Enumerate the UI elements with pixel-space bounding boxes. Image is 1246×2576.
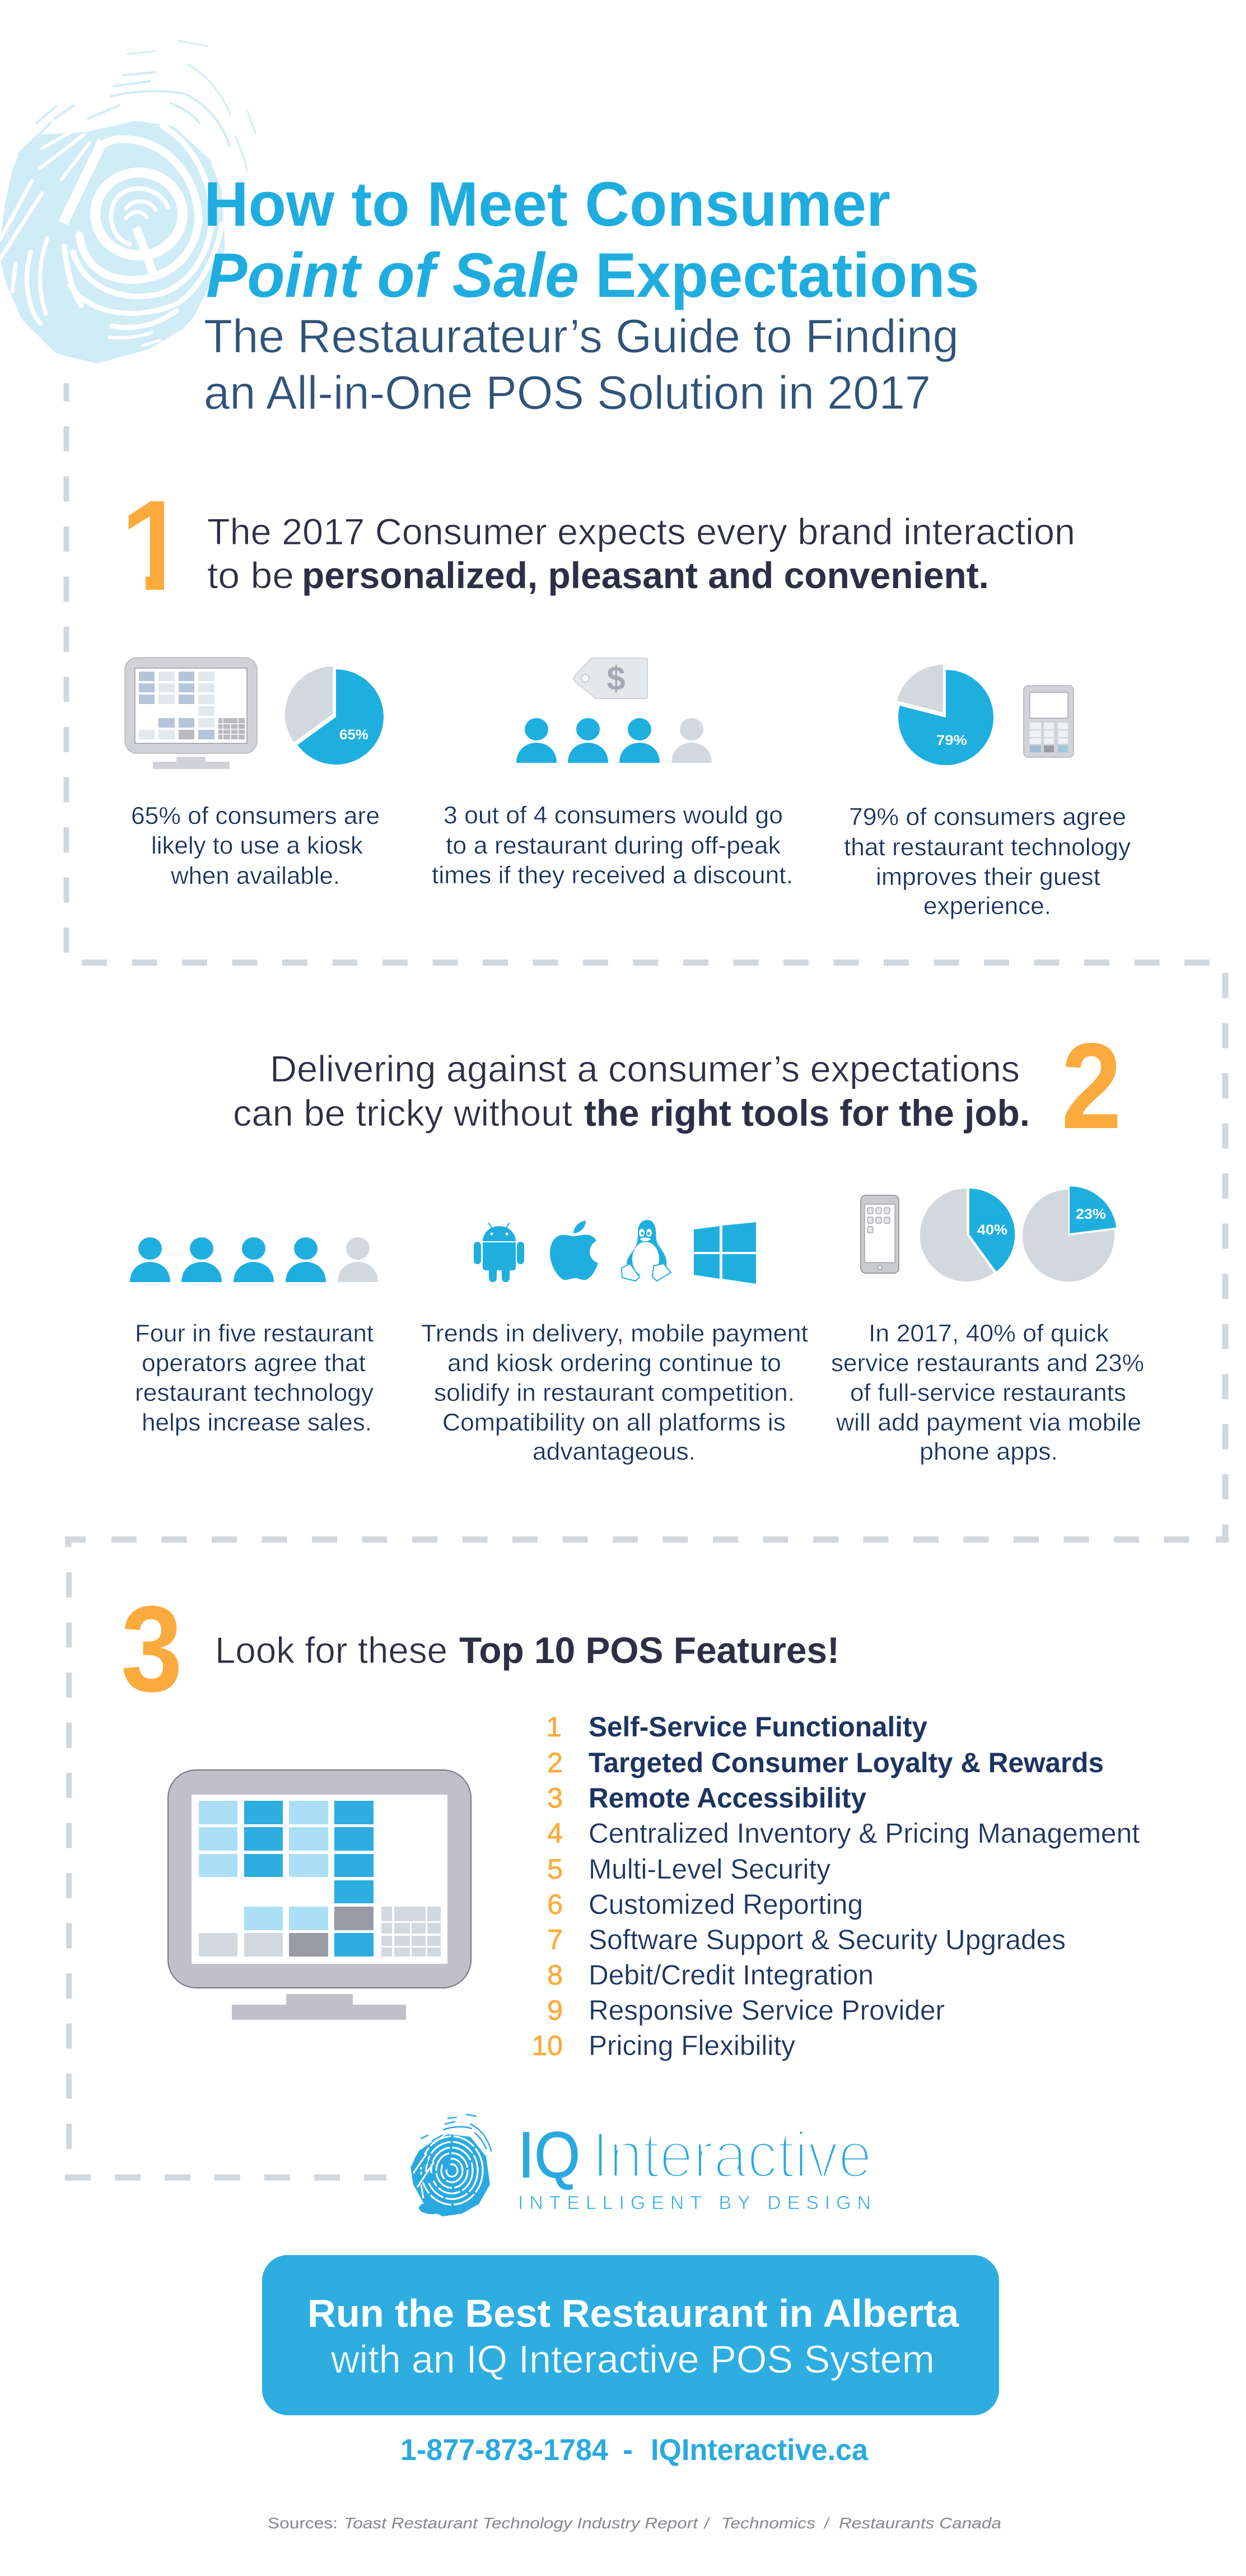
text: guest experience stat — [844, 803, 1131, 920]
chart: 65% pie: 65% — [339, 727, 368, 743]
title: How to Meet Consumer — [204, 169, 890, 239]
title: Expectations — [595, 240, 979, 310]
title — [204, 169, 979, 310]
text: kiosk stat — [131, 802, 380, 889]
text: guest experience stat: 79% of consumers agree — [849, 803, 1126, 831]
list: top 10 POS features: 4 — [547, 1818, 563, 1849]
list: top 10 POS features: 10 — [531, 2030, 563, 2061]
list: top 10 POS features: Remote Accessibility — [589, 1782, 866, 1814]
sources: Technomics — [721, 2514, 815, 2532]
text: guest experience stat: that restaurant technology — [844, 833, 1131, 861]
icon: 3 of 4 people — [516, 718, 712, 763]
list: top 10 POS features: Software Support & Security Upgrades — [589, 1924, 1066, 1955]
title: Point of Sale — [206, 240, 579, 310]
text: mobile payment stat: In 2017, 40% of quick — [869, 1320, 1109, 1347]
text: discount stat: times if they received a discount. — [432, 861, 793, 889]
list: top 10 POS features: 1 — [546, 1711, 562, 1743]
subtitle: an All-in-One POS Solution in 2017 — [204, 366, 931, 419]
icon: windows — [694, 1222, 756, 1284]
text: platforms stat: advantageous. — [533, 1438, 696, 1465]
text: mobile payment stat: will add payment via mobile — [836, 1409, 1141, 1436]
section 2 number: 2 — [1061, 1018, 1122, 1154]
sources: Sources: — [268, 2514, 338, 2532]
list: top 10 POS features: Responsive Service Provider — [589, 1995, 945, 2026]
text: platforms stat: and kiosk ordering continue to — [447, 1349, 781, 1377]
contact details: IQInteractive.ca — [651, 2433, 869, 2467]
text: kiosk stat: when available. — [170, 862, 340, 889]
sources — [268, 2514, 1001, 2532]
list: top 10 POS features: Multi-Level Security — [589, 1853, 830, 1885]
text: platforms stat — [421, 1320, 808, 1465]
icon: android — [474, 1223, 524, 1282]
list: top 10 POS features: 6 — [547, 1889, 563, 1920]
section 2 heading: can be tricky without — [233, 1092, 572, 1134]
icon: 4 of 5 people — [130, 1237, 378, 1282]
section 2 heading: the right tools for the job. — [584, 1092, 1030, 1134]
section 2 heading — [233, 1048, 1030, 1134]
list: top 10 POS features: Debit/Credit Integration — [589, 1959, 874, 1991]
section 3 heading — [215, 1629, 839, 1671]
section 3 number: 3 — [121, 1581, 183, 1717]
icon: price tag: $ — [606, 660, 626, 697]
text: operators stat — [135, 1320, 374, 1436]
list: top 10 POS features: Targeted Consumer Loyalty & Rewards — [589, 1747, 1104, 1778]
text: platforms stat: Compatibility on all platforms is — [442, 1409, 786, 1436]
text: discount stat — [432, 802, 793, 889]
sources: / — [823, 2514, 830, 2532]
text: guest experience stat: experience. — [923, 892, 1051, 920]
list: top 10 POS features: Centralized Inventory & Pricing Management — [589, 1818, 1140, 1849]
list: top 10 POS features: Self-Service Functionality — [589, 1711, 927, 1743]
text: operators stat: operators agree that — [142, 1349, 366, 1377]
text: kiosk stat: likely to use a kiosk — [151, 832, 363, 859]
text: mobile payment stat: of full-service restaurants — [850, 1379, 1126, 1406]
logo: IQ Interactive: Interactive — [592, 2118, 872, 2191]
section 1 heading: personalized, pleasant and convenient. — [302, 555, 989, 596]
chart: 40% pie: 40% — [977, 1222, 1007, 1238]
text: guest experience stat: improves their guest — [876, 863, 1100, 891]
text: kiosk stat: 65% of consumers are — [131, 802, 380, 830]
logo: IQ Interactive: IQ — [518, 2118, 580, 2191]
logo: IQ Interactive: INTELLIGENT BY DESIGN — [518, 2192, 871, 2214]
text: platforms stat: solidify in restaurant competition. — [434, 1379, 795, 1406]
background fingerprint — [0, 41, 255, 364]
logo: IQ Interactive — [410, 2114, 872, 2216]
section 1 heading — [207, 511, 1075, 596]
icon: apple — [550, 1221, 598, 1280]
icon: POS monitor — [168, 1770, 471, 2020]
sources: / — [703, 2514, 711, 2532]
contact details: - — [623, 2433, 633, 2467]
section 1 number: 1 — [120, 473, 192, 617]
list: top 10 POS features: Pricing Flexibility — [589, 2030, 795, 2061]
list: top 10 POS features: 3 — [547, 1782, 563, 1814]
list: top 10 POS features: 5 — [547, 1853, 563, 1885]
text: platforms stat: Trends in delivery, mobile payment — [421, 1320, 808, 1347]
contact details — [400, 2433, 869, 2467]
text: operators stat: helps increase sales. — [142, 1409, 372, 1436]
icon: price tag — [574, 658, 647, 698]
list: top 10 POS features: 8 — [547, 1959, 563, 1991]
text: operators stat: restaurant technology — [135, 1379, 374, 1406]
chart: 79% pie — [897, 665, 993, 765]
subtitle: The Restaurateur’s Guide to Finding — [204, 310, 959, 362]
text: mobile payment stat: service restaurants and 23% — [831, 1349, 1144, 1377]
text: mobile payment stat: phone apps. — [920, 1438, 1058, 1465]
list: top 10 POS features: Customized Reporting — [589, 1889, 863, 1920]
text: discount stat: 3 out of 4 consumers would go — [444, 802, 783, 829]
chart: 23% pie — [1023, 1186, 1116, 1282]
contact details: 1-877-873-1784 — [400, 2433, 608, 2467]
list: top 10 POS features: 7 — [547, 1924, 563, 1955]
chart: 65% pie — [285, 667, 384, 765]
section 3 heading: Top 10 POS Features! — [459, 1629, 839, 1671]
subtitle — [204, 310, 959, 419]
icon: payment terminal — [1024, 686, 1074, 757]
text: operators stat: Four in five restaurant — [135, 1320, 374, 1347]
chart: 79% pie: 79% — [936, 733, 967, 748]
call to action button: Run the Best Restaurant in Alberta — [307, 2291, 959, 2335]
section 3 heading: Look for these — [215, 1629, 447, 1671]
section 2 heading: Delivering against a consumer’s expectations — [270, 1048, 1020, 1089]
chart: 23% pie: 23% — [1076, 1207, 1106, 1222]
chart: 40% pie — [920, 1189, 1015, 1282]
list: top 10 POS features: 9 — [547, 1995, 563, 2026]
call to action button: with an IQ Interactive POS System — [330, 2337, 935, 2381]
list: top 10 POS features — [531, 1711, 1140, 2061]
icon: linux penguin — [622, 1220, 671, 1281]
icon: kiosk monitor — [125, 658, 257, 769]
sources: Toast Restaurant Technology Industry Report — [344, 2514, 698, 2532]
icon: smartphone — [861, 1195, 899, 1273]
text: mobile payment stat — [831, 1320, 1144, 1465]
section 1 heading: The 2017 Consumer expects every brand interaction — [207, 511, 1075, 552]
list: top 10 POS features: 2 — [547, 1747, 563, 1778]
call to action button — [262, 2255, 999, 2415]
section 1 heading: to be — [207, 555, 294, 596]
sources: Restaurants Canada — [839, 2514, 1001, 2532]
text: discount stat: to a restaurant during off-peak — [446, 832, 781, 859]
